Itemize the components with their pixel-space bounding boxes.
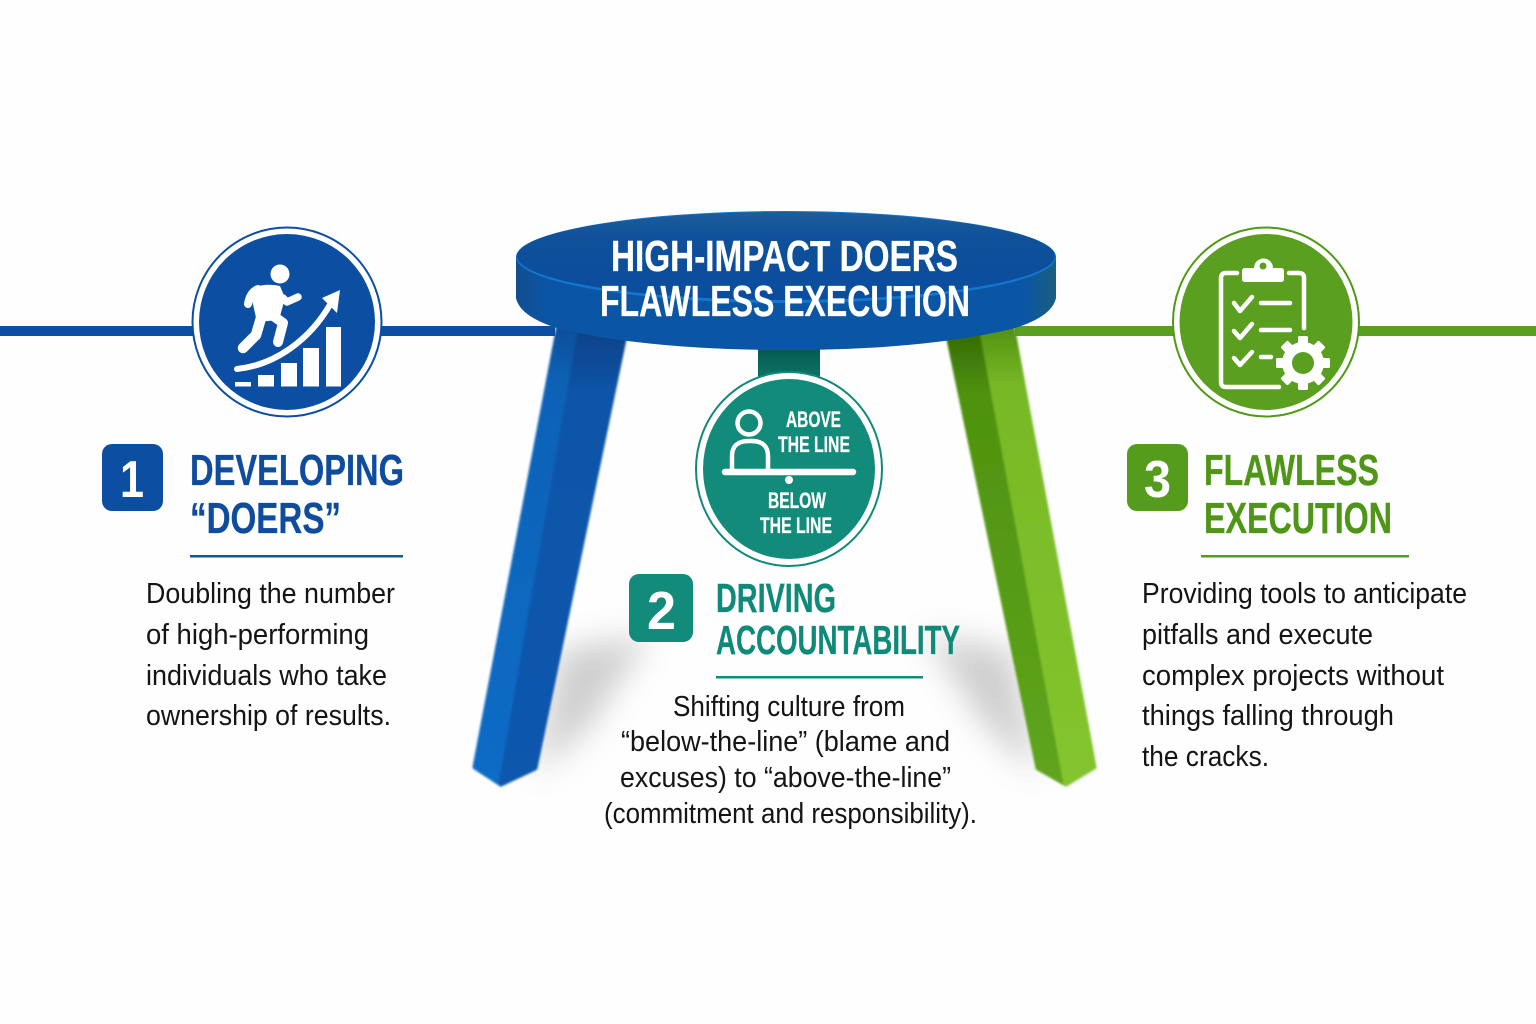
teal circle icon: above / below the line: BELOW (768, 488, 826, 513)
green horizontal line (1015, 326, 1536, 336)
heading 1: DEVELOPING (190, 446, 404, 495)
body text 2: Shifting culture from (673, 691, 905, 723)
body text 3 (1142, 578, 1467, 773)
blue horizontal line (0, 326, 555, 336)
seat title (600, 233, 970, 326)
badge 2: 2 (647, 581, 676, 641)
seat title: FLAWLESS EXECUTION (600, 278, 970, 326)
teal circle icon: above / below the line: THE LINE (778, 432, 850, 457)
stool floor shadows (535, 635, 1038, 775)
body text 1 (146, 578, 395, 732)
teal circle icon: above / below the line (696, 372, 882, 566)
badge 3 (1127, 444, 1188, 511)
body text 3: Providing tools to anticipate (1142, 578, 1467, 610)
gear (1276, 336, 1330, 390)
body text 2 (604, 691, 977, 830)
body text 1: ownership of results. (146, 700, 391, 732)
badge 3: 3 (1144, 451, 1171, 509)
body text 2: excuses) to “above-the-line” (620, 762, 951, 794)
body text 2: (commitment and responsibility). (604, 798, 977, 830)
centre teal post (758, 340, 820, 380)
heading 1 (190, 446, 404, 543)
seat title: HIGH-IMPACT DOERS (611, 233, 958, 281)
heading 2: DRIVING (716, 575, 836, 621)
heading 1: “DOERS” (190, 494, 341, 543)
body text 3: complex projects without (1142, 660, 1444, 692)
blue circle icon: runner climbing growth chart (192, 228, 382, 416)
heading 3: EXECUTION (1204, 494, 1392, 543)
heading 3 (1204, 446, 1392, 543)
green circle icon: clipboard checklist with gear (1173, 228, 1359, 416)
panel: flawless execution (1127, 444, 1467, 773)
body text 3: the cracks. (1142, 741, 1269, 773)
body text 1: of high-performing (146, 619, 369, 651)
left blue stool leg (475, 320, 627, 784)
heading 2 (716, 575, 960, 663)
badge 2 (629, 574, 693, 642)
badge 1: 1 (120, 451, 144, 509)
panel: developing doers (102, 444, 404, 732)
body text 2: “below-the-line” (blame and (621, 726, 950, 758)
teal circle icon: above / below the line: ABOVE (786, 407, 841, 432)
heading 3: FLAWLESS (1204, 446, 1379, 495)
stool seat (516, 211, 1056, 350)
body text 1: individuals who take (146, 660, 387, 692)
teal circle icon: above / below the line: THE LINE (760, 513, 832, 538)
heading 2: ACCOUNTABILITY (716, 617, 960, 663)
badge 1 (102, 444, 163, 511)
body text 3: pitfalls and execute (1142, 619, 1373, 651)
body text 1: Doubling the number (146, 578, 395, 610)
right green stool leg (946, 320, 1094, 784)
panel: driving accountability (604, 574, 977, 830)
body text 3: things falling through (1142, 700, 1394, 732)
